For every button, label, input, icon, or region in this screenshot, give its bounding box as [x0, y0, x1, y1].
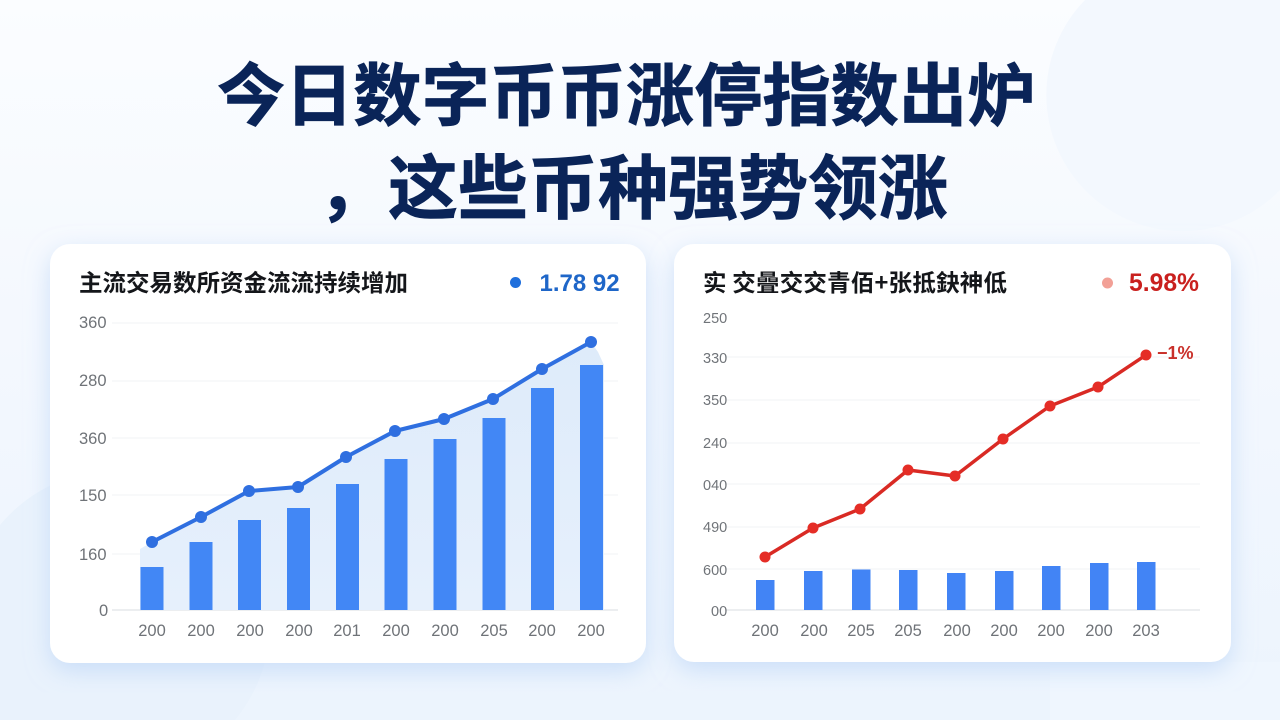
chart: bars and line	[703, 311, 1200, 640]
panel heading: 实 交曡交交青佰+张抵鈌神低	[703, 264, 1008, 298]
y axis labels: 360	[79, 314, 107, 332]
bottom right pale patch	[1050, 662, 1280, 720]
y axis labels: 490	[703, 520, 727, 536]
x axis labels: 200	[382, 622, 410, 640]
title: ，这些币种强势领涨	[318, 133, 948, 234]
y axis labels: 040	[703, 478, 727, 494]
y axis labels: 150	[79, 487, 107, 505]
x axis labels: 200	[1037, 622, 1065, 640]
x axis labels: 200	[187, 622, 215, 640]
chart: bars and line	[79, 314, 618, 640]
x axis labels: 203	[1132, 622, 1160, 640]
y axis labels: 360	[79, 430, 107, 448]
x axis labels: 200	[1085, 622, 1113, 640]
x axis labels: 200	[138, 622, 166, 640]
y axis labels: 160	[79, 546, 107, 564]
panel: realtime trading	[674, 244, 1231, 662]
bars	[140, 365, 603, 610]
line series	[760, 350, 1152, 562]
y axis labels: 00	[711, 604, 727, 620]
title: 今日数字币币涨停指数出炉	[217, 41, 1035, 140]
stat: blue value: 1.78 92	[540, 270, 620, 297]
x axis labels: 200	[800, 622, 828, 640]
area under line	[140, 342, 604, 610]
y axis labels: 0	[99, 602, 108, 620]
x axis labels: 205	[480, 622, 508, 640]
x axis labels: 200	[990, 622, 1018, 640]
x axis labels: 205	[847, 622, 875, 640]
y axis labels: 330	[703, 351, 727, 367]
x axis labels: 205	[894, 622, 922, 640]
x axis labels: 201	[333, 622, 361, 640]
y axis labels	[703, 311, 727, 620]
y axis labels: 280	[79, 372, 107, 390]
y axis labels: 250	[703, 311, 727, 327]
x axis labels: 200	[528, 622, 556, 640]
x axis labels	[751, 622, 1160, 640]
bars	[756, 562, 1156, 610]
x axis labels: 200	[577, 622, 605, 640]
x axis labels: 200	[943, 622, 971, 640]
panel: exchange capital inflow	[50, 244, 646, 663]
y axis labels: 240	[703, 436, 727, 452]
line end label: −1%	[1157, 343, 1194, 363]
stat: red value: 5.98%	[1129, 270, 1199, 297]
title	[217, 41, 1035, 234]
y axis labels: 350	[703, 393, 727, 409]
y axis labels	[79, 314, 108, 620]
line series	[146, 336, 597, 548]
x axis labels: 200	[751, 622, 779, 640]
x axis labels: 200	[285, 622, 313, 640]
x axis labels: 200	[431, 622, 459, 640]
x axis labels	[138, 622, 605, 640]
x axis labels: 200	[236, 622, 264, 640]
y axis labels: 600	[703, 563, 727, 579]
panel heading: 主流交易数所资金流流持续增加	[79, 264, 408, 298]
